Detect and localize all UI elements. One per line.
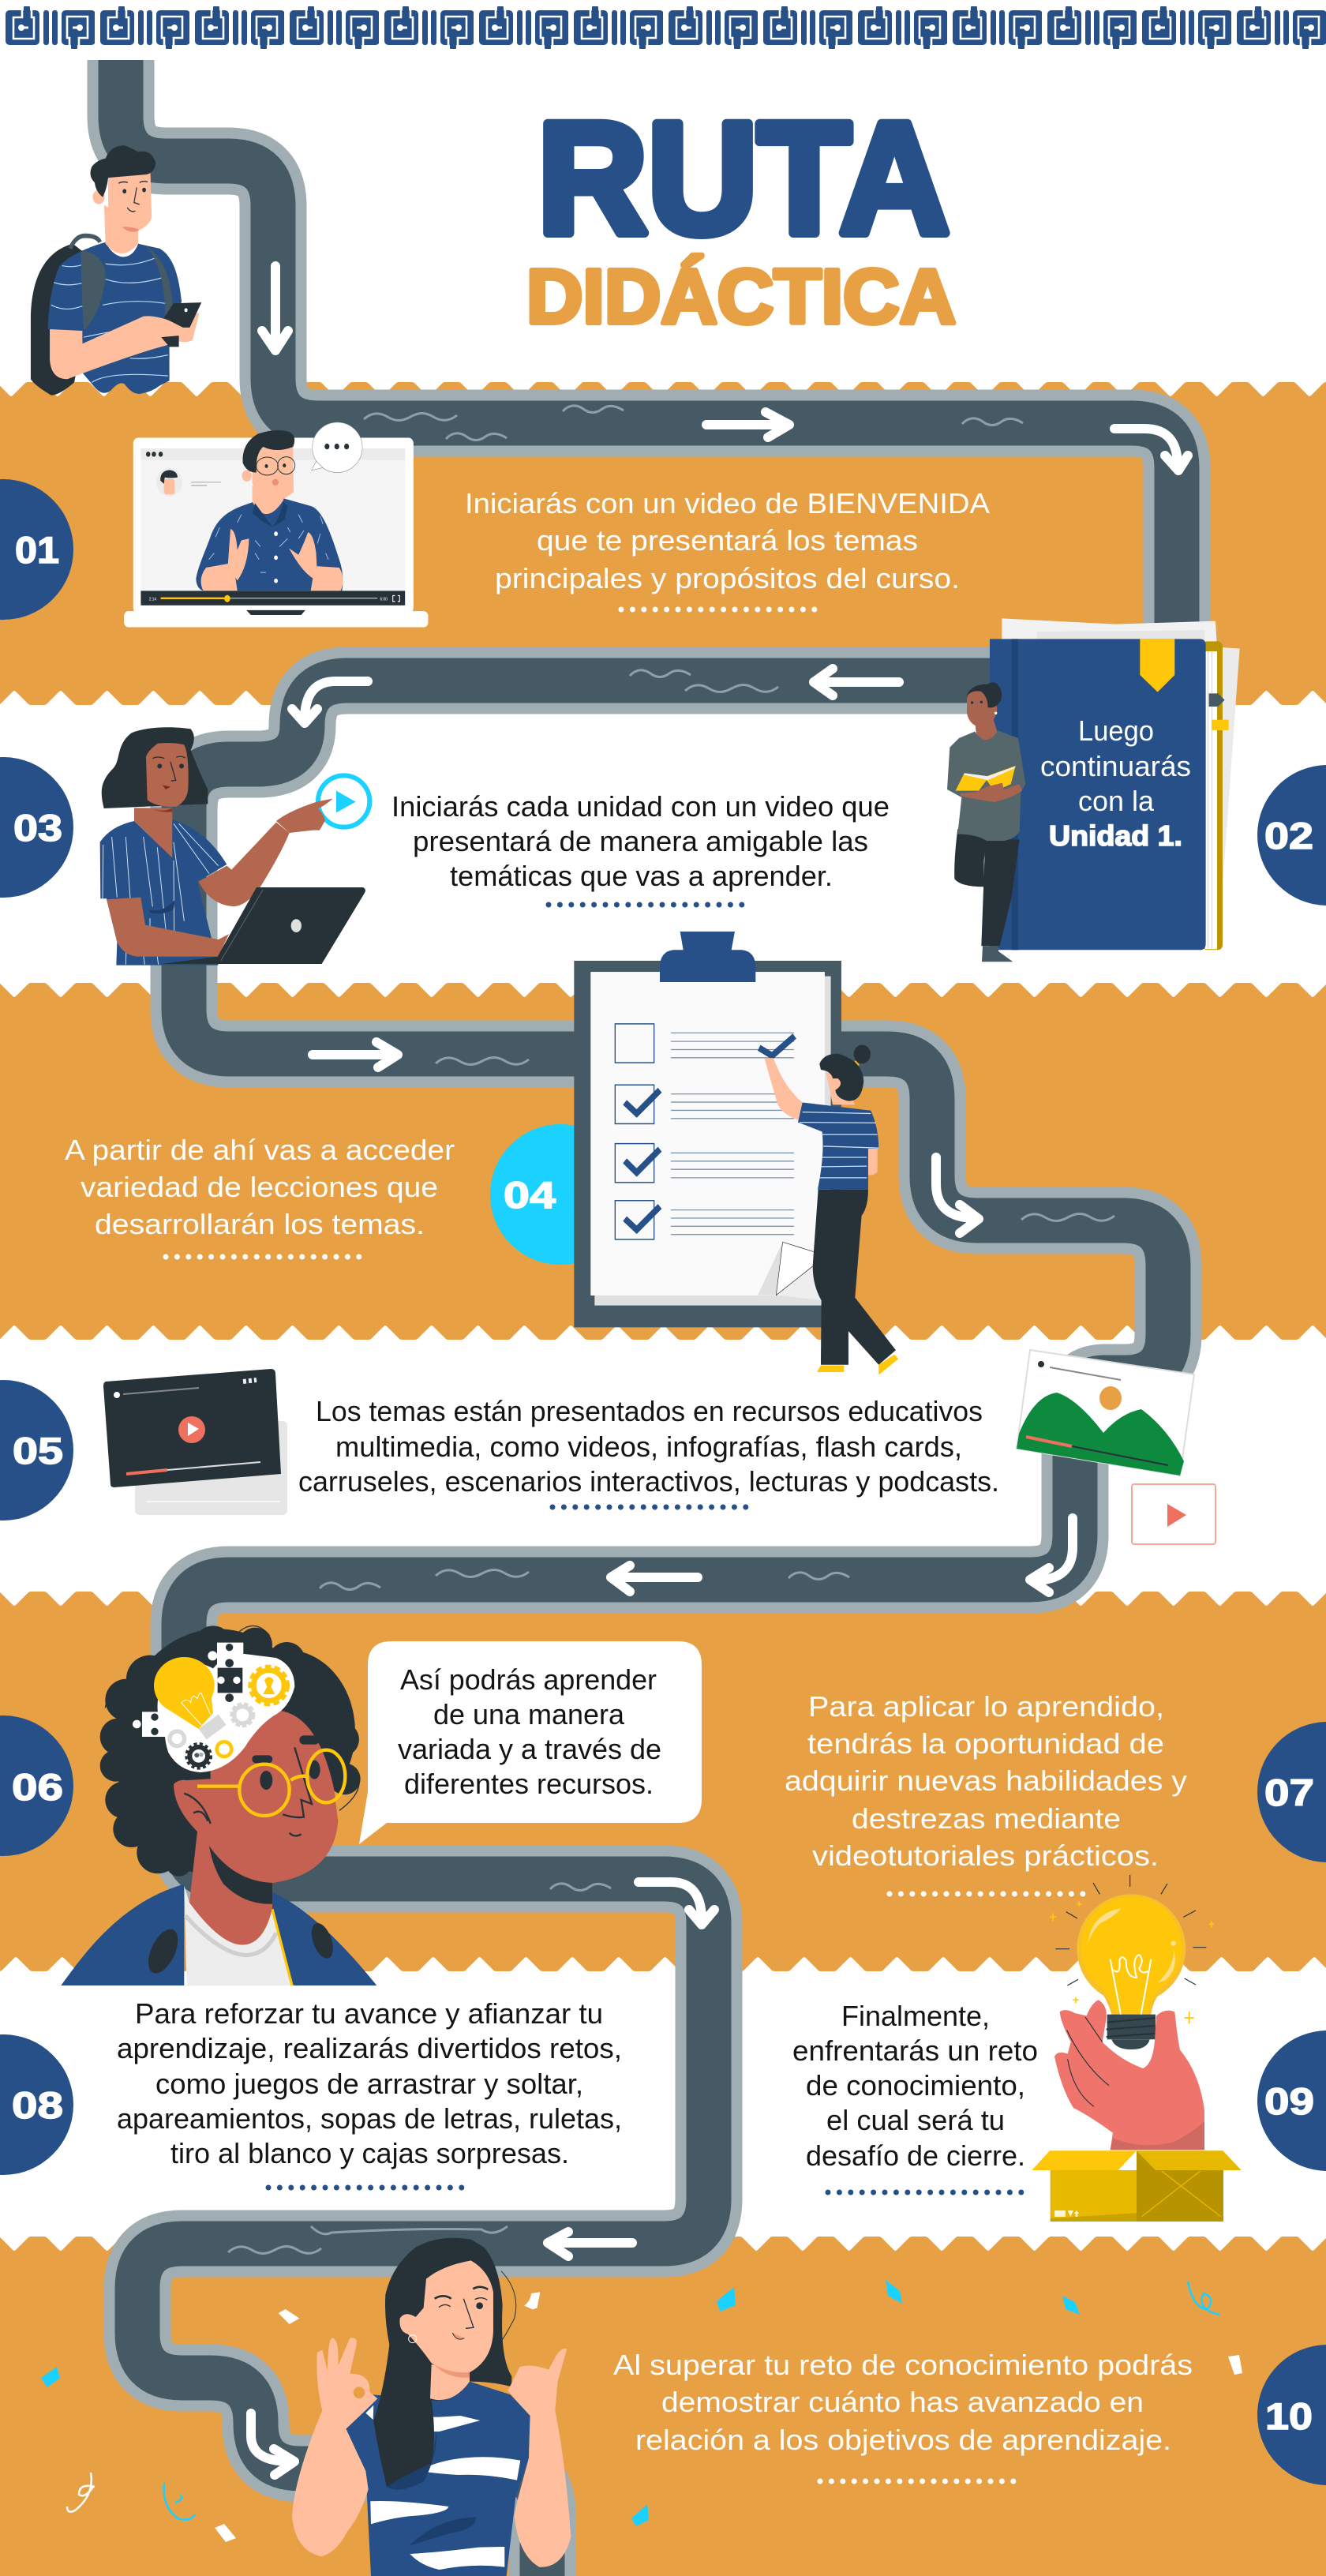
text block 08: tiro al blanco y cajas sorpresas.: [170, 2137, 569, 2169]
icon: dark video player card: [103, 1369, 287, 1515]
text block 09: [792, 2000, 1038, 2192]
text block 01: principales y propósitos del curso.: [495, 562, 960, 594]
text block 07: adquirir nuevas habilidades y: [785, 1764, 1187, 1797]
badge 03: [0, 757, 73, 898]
text block 03: Iniciarás cada unidad con un video que: [391, 790, 890, 823]
badge 10: [1257, 2345, 1326, 2485]
badge 02: [1257, 765, 1326, 906]
text block 05: multimedia, como videos, infografías, flash cards,: [335, 1430, 962, 1463]
speech bubble: variada y a través de: [398, 1733, 661, 1765]
illustration: winking woman giving thumbs up: [279, 2238, 571, 2576]
text block 01: Iniciarás con un video de BIENVENIDA: [465, 487, 990, 519]
text block 07: [785, 1690, 1187, 1894]
badge 06: 06: [12, 1766, 63, 1808]
text block 01: que te presentará los temas: [537, 524, 918, 557]
road direction arrows: [251, 266, 1188, 2475]
text block 09: enfrentarás un reto: [792, 2034, 1038, 2067]
text block 05: [298, 1395, 999, 1507]
text block 08: aprendizaje, realizarás divertidos retos,: [117, 2032, 622, 2064]
text block 08: apareamientos, sopas de letras, ruletas,: [117, 2102, 622, 2135]
text block 04: A partir de ahí vas a acceder: [65, 1134, 455, 1166]
text block 08: como juegos de arrastrar y soltar,: [155, 2068, 583, 2100]
illustration: person thinking with ideas in head: [61, 1625, 376, 1985]
text block 09: el cual será tu: [826, 2104, 1005, 2136]
road wave markings: [228, 406, 1114, 2253]
text block 03: temáticas que vas a aprender.: [450, 860, 833, 892]
illustration: woman pointing at play button with laptop: [100, 727, 369, 966]
text block 08: Para reforzar tu avance y afianzar tu: [135, 1997, 603, 2030]
badge 02: 02: [1264, 815, 1313, 857]
speech bubble: Así podrás aprender: [400, 1663, 657, 1696]
text block 10: [613, 2349, 1193, 2481]
text block 08: [117, 1997, 622, 2188]
speech bubble: de una manera: [433, 1698, 625, 1730]
badge 03: 03: [13, 807, 62, 849]
text block 02: Luego: [1078, 714, 1154, 747]
badge 09: 09: [1264, 2080, 1314, 2122]
greek key border: [0, 0, 1326, 52]
illustration: notebook with reading woman: [947, 618, 1240, 962]
text block 05: carruseles, escenarios interactivos, lecturas y podcasts.: [298, 1465, 999, 1498]
badge 05: 05: [13, 1430, 63, 1472]
badge 01: [0, 479, 73, 620]
text block 07: tendrás la oportunidad de: [807, 1727, 1164, 1760]
text block 01: [465, 487, 990, 609]
badge 08: 08: [12, 2084, 63, 2126]
badge 04: 04: [504, 1174, 556, 1216]
illustration: clipboard checklist with woman: [574, 932, 898, 1375]
badge 07: 07: [1264, 1772, 1314, 1813]
text block 07: destrezas mediante: [852, 1802, 1121, 1835]
text block 02: Unidad 1.: [1049, 819, 1182, 852]
speech bubble: diferentes recursos.: [404, 1768, 654, 1800]
illustration: laptop with video lesson: 2:14: [149, 597, 156, 602]
badge 10: 10: [1265, 2395, 1313, 2437]
text block 09: Finalmente,: [841, 2000, 990, 2032]
illustration: hand holding light bulb from box: [1032, 1875, 1242, 2222]
text block 05: Los temas están presentados en recursos educativos: [316, 1395, 983, 1427]
title: [526, 89, 956, 339]
badge 07: [1257, 1722, 1326, 1862]
badge 05: [0, 1380, 73, 1520]
badge 09: [1257, 2030, 1326, 2171]
icon: landscape image card: [1017, 1350, 1194, 1475]
badge 04: [490, 1124, 631, 1265]
text block 07: Para aplicar lo aprendido,: [808, 1690, 1164, 1723]
text block 02: [1040, 714, 1191, 852]
text block 02: continuarás: [1040, 750, 1191, 782]
illustration: laptop with video lesson: [124, 422, 428, 628]
text block 03: presentará de manera amigable las: [413, 825, 868, 857]
text block 09: de conocimiento,: [806, 2069, 1025, 2102]
text block 04: variedad de lecciones que: [81, 1171, 438, 1203]
winding road: [121, 60, 1177, 2576]
title: DIDÁCTICA: [526, 253, 956, 339]
text block 10: relación a los objetivos de aprendizaje.: [635, 2424, 1171, 2456]
badge 01: 01: [15, 529, 59, 571]
title: RUTA: [538, 89, 950, 267]
confetti: [41, 2280, 1242, 2542]
illustration: laptop with video lesson: 6:00: [380, 597, 388, 602]
speech bubble: [359, 1641, 702, 1844]
text block 10: demostrar cuánto has avanzado en: [661, 2386, 1144, 2418]
badge 06: [0, 1715, 73, 1856]
text block 10: Al superar tu reto de conocimiento podrás: [613, 2349, 1193, 2381]
badge 08: [0, 2034, 73, 2175]
text block 03: [391, 790, 890, 905]
text block 02: con la: [1078, 785, 1155, 817]
icon: play button card: [1132, 1484, 1216, 1544]
text block 04: [65, 1134, 455, 1257]
illustration: student with backpack and phone: [31, 145, 201, 396]
text block 04: desarrollarán los temas.: [95, 1208, 425, 1240]
text block 09: desafío de cierre.: [806, 2139, 1025, 2172]
text block 07: videotutoriales prácticos.: [812, 1839, 1159, 1872]
